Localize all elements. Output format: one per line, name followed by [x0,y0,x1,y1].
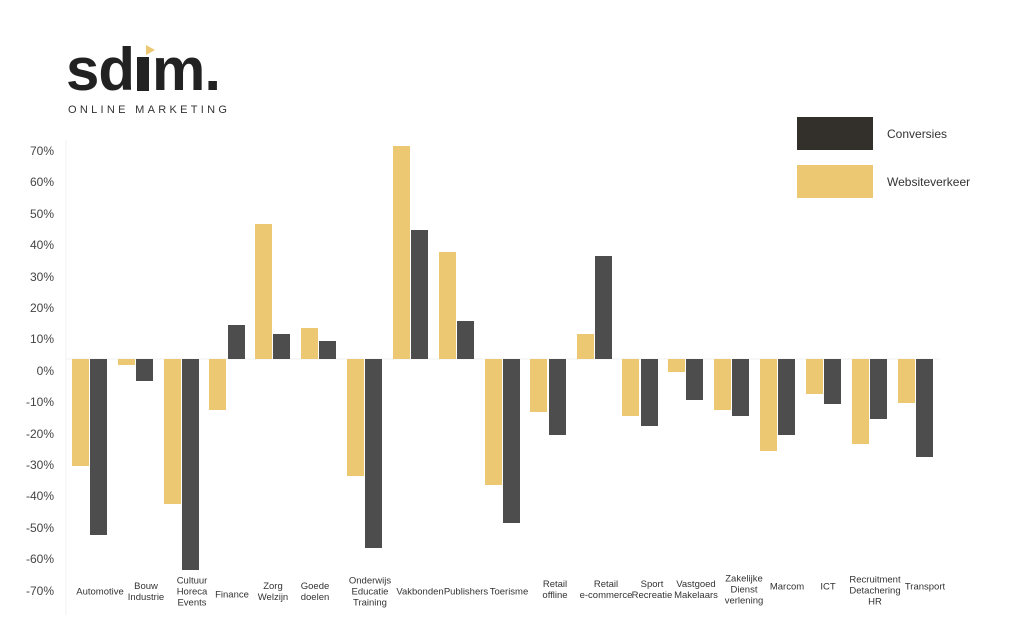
category labels: Toerisme [490,586,528,598]
y axis labels: 50% [30,207,54,221]
category labels: e-commerce [580,590,632,601]
category labels: Recruitment [849,574,901,586]
y axis labels: 30% [30,270,54,284]
y axis labels: 20% [30,301,54,315]
category labels: Vastgoed [676,579,716,590]
category labels: Cultuur [177,576,207,586]
category labels: Training [353,598,387,608]
category labels: Retail [594,579,618,590]
category labels: Makelaars [674,590,718,601]
category labels: Zakelijke [725,574,763,584]
legend: Websiteverkeer: Websiteverkeer [887,175,970,189]
y axis labels: -50% [26,521,54,535]
category labels [76,574,946,608]
category labels: Goede [301,581,329,592]
y axis labels: -40% [26,489,54,503]
category labels: Finance [215,590,249,600]
category labels: doelen [301,592,329,603]
legend [797,117,970,198]
logo subtitle: ONLINE MARKETING [68,104,230,116]
y axis labels: -30% [26,458,54,472]
category labels: Bouw [134,581,158,592]
category labels: Onderwijs [349,576,391,586]
icon: logo triangle [146,45,155,55]
category labels: offline [542,590,568,601]
category labels: Events [177,598,207,608]
category labels: Sport [641,579,663,590]
category labels: HR [868,596,882,608]
category labels: Welzijn [258,592,288,603]
category labels: Educatie [352,586,388,598]
y axis labels: 10% [30,332,54,346]
category labels: Zorg [263,581,283,592]
y axis labels: 70% [30,144,54,158]
category labels: Horeca [177,586,207,598]
category labels: Transport [905,582,945,592]
category labels: Marcom [770,582,804,592]
category labels: Recreatie [632,590,672,601]
category labels: verlening [725,596,763,606]
y axis labels: -70% [26,584,54,598]
legend: Websiteverkeer [797,165,970,198]
y axis labels: 60% [30,175,54,189]
y axis labels: -10% [26,395,54,409]
y axis labels: 40% [30,238,54,252]
category labels: Industrie [128,592,164,603]
legend: Conversies: Conversies [887,127,947,141]
logo [66,36,230,116]
category labels: Automotive [76,586,124,598]
y axis labels: -60% [26,552,54,566]
category labels: ICT [820,582,836,592]
category labels: Vakbonden [396,586,444,598]
y axis labels: -20% [26,427,54,441]
category labels: Retail [543,579,567,590]
logo wordmark: sd m. [66,36,220,103]
legend: Conversies [797,117,947,150]
y axis labels: 0% [37,364,54,378]
category labels: Dienst [731,584,757,596]
category labels: Detachering [849,586,901,596]
category labels: Publishers [444,586,488,598]
y axis labels [26,144,54,598]
